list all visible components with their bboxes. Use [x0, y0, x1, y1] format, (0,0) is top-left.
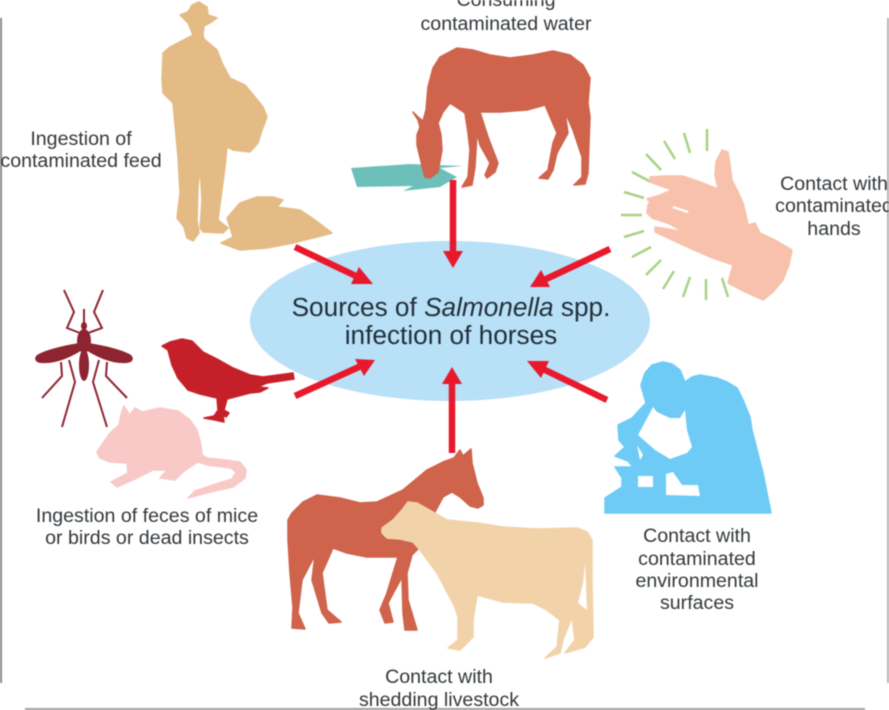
arrow: from pests	[295, 359, 375, 396]
label: feces of mice or birds or dead insects: or birds or dead insects	[45, 527, 249, 549]
central ellipse	[250, 241, 650, 401]
icon: water	[351, 164, 463, 191]
icon: farmer carrying feed	[162, 2, 332, 250]
icon: mouse	[97, 406, 246, 498]
central title: infection of horses	[345, 320, 557, 350]
label: contaminated feed: contaminated feed	[0, 150, 162, 172]
central title: Sources of Salmonella spp.	[292, 292, 610, 322]
label: environmental surfaces: surfaces	[660, 592, 734, 614]
label: feces of mice or birds or dead insects: Ingestion of feces of mice	[36, 505, 258, 527]
arrow: from surfaces	[527, 361, 607, 400]
arrow: from feed	[295, 247, 373, 284]
label: contaminated feed: Ingestion of	[30, 128, 132, 150]
icon: mosquito	[35, 290, 133, 427]
icon: drinking horse	[413, 48, 590, 187]
icon: cow	[382, 502, 593, 658]
label: environmental surfaces: Contact with	[643, 525, 751, 547]
icon: person at microscope	[605, 362, 771, 513]
label: environmental surfaces: environmental	[635, 570, 759, 592]
icon: bird	[162, 339, 294, 422]
arrow: from water	[443, 180, 463, 268]
arrow: from livestock	[442, 367, 462, 453]
label: contaminated hands: hands	[807, 218, 861, 240]
label: contaminated water: contaminated water	[420, 13, 592, 35]
label: environmental surfaces: contaminated	[638, 548, 756, 570]
label: shedding livestock: Contact with	[385, 666, 493, 688]
icon: hand with rays	[621, 129, 792, 300]
label: contaminated hands: Contact with	[780, 173, 888, 195]
icon: standing horse	[288, 449, 483, 630]
arrow: from hands	[530, 249, 610, 287]
